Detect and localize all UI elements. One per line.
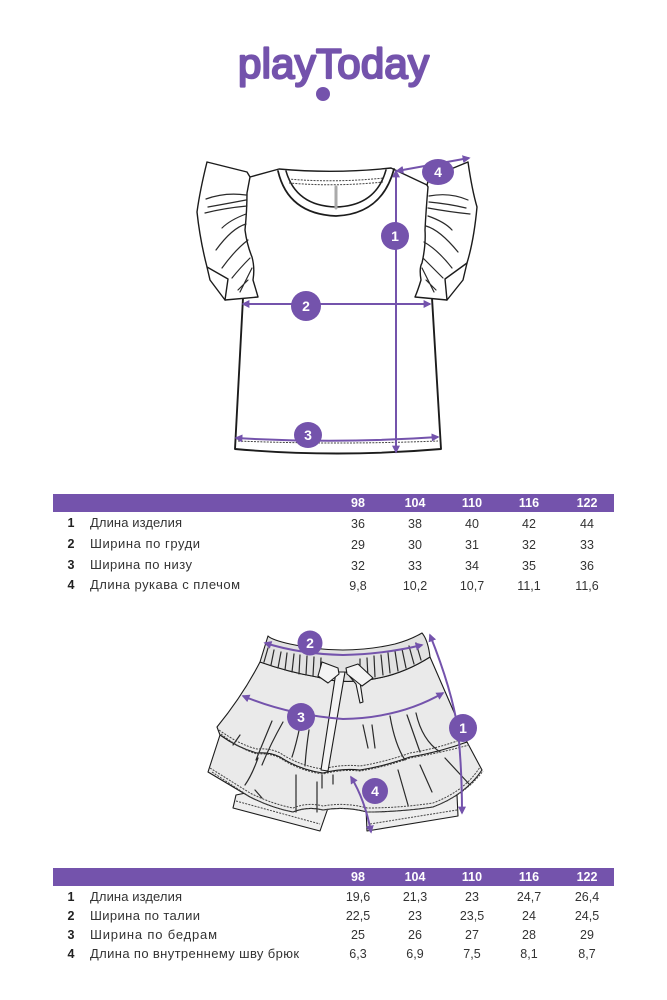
table 1 row 1: 40 bbox=[465, 517, 479, 531]
table 1 header bbox=[53, 494, 614, 512]
table 1 bbox=[53, 494, 614, 593]
table 2 header: 104 bbox=[405, 870, 425, 884]
table 2 row 2: 24 bbox=[522, 909, 536, 923]
table 2 row 1: 26,4 bbox=[575, 890, 599, 904]
table 1 row 1: Длина изделия bbox=[90, 515, 182, 530]
table 1 row 3 bbox=[68, 557, 594, 573]
table 1 row 3: 32 bbox=[351, 559, 365, 573]
table 2 row 3: 28 bbox=[522, 928, 536, 942]
t-shirt shoulders and neck bbox=[250, 168, 427, 185]
table 2 row 2: 24,5 bbox=[575, 909, 599, 923]
measure 4: sleeve: 4 bbox=[434, 164, 442, 180]
logo: playToday bbox=[238, 40, 429, 87]
table 1 row 4: 4 bbox=[68, 578, 75, 592]
table 1 header: 122 bbox=[577, 496, 597, 510]
measure 2: chest: 2 bbox=[302, 298, 310, 314]
table 1 row 1: 36 bbox=[351, 517, 365, 531]
table 2 row 3 bbox=[68, 927, 594, 942]
table 2 header: 110 bbox=[462, 870, 482, 884]
t-shirt body bbox=[235, 168, 441, 454]
t-shirt drawing bbox=[197, 162, 477, 454]
waistband gathers bbox=[264, 643, 421, 679]
measure 4: sleeve bbox=[397, 158, 469, 185]
measure 1: length: 1 bbox=[391, 228, 399, 244]
table 1 row 3: 35 bbox=[522, 559, 536, 573]
table 2 header: 116 bbox=[519, 870, 539, 884]
table 2 row 1: 1 bbox=[68, 890, 75, 904]
table 2 row 1 bbox=[68, 889, 599, 904]
table 1 row 1: 38 bbox=[408, 517, 422, 531]
table 1 row 4: 9,8 bbox=[349, 579, 367, 593]
table 2 row 1: 19,6 bbox=[346, 890, 370, 904]
table 1 row 1: 42 bbox=[522, 517, 536, 531]
measure 2: chest bbox=[243, 291, 430, 321]
table 2 row 2: 22,5 bbox=[346, 909, 370, 923]
table 2 row 3: 3 bbox=[68, 928, 75, 942]
shorts measure 1: length bbox=[430, 635, 477, 813]
t-shirt collar bbox=[278, 169, 394, 216]
table 2 row 2 bbox=[68, 908, 599, 923]
table 1 header: 104 bbox=[405, 496, 425, 510]
table 1 row 2: 2 bbox=[68, 537, 75, 551]
shorts measure 1: length: 1 bbox=[459, 720, 467, 736]
table 2 row 1: Длина изделия bbox=[90, 889, 182, 904]
table 1 row 3: 3 bbox=[68, 558, 75, 572]
tier stitching bbox=[210, 730, 483, 824]
table 1 row 1 bbox=[68, 515, 594, 531]
table 1 row 3: 33 bbox=[408, 559, 422, 573]
table 2 row 4: 6,3 bbox=[349, 947, 367, 961]
table 1 row 1: 44 bbox=[580, 517, 594, 531]
table 1 row 2: 32 bbox=[522, 538, 536, 552]
shorts measure 4: inseam bbox=[351, 777, 388, 832]
table 2 header: 122 bbox=[577, 870, 597, 884]
lower tier bbox=[208, 735, 482, 812]
t-shirt side seams and hem bbox=[235, 298, 441, 454]
table 2 header bbox=[53, 868, 614, 886]
shorts measure 3: hips bbox=[243, 693, 443, 731]
shorts measure 2: waist bbox=[265, 630, 422, 656]
table 1 row 4: 10,7 bbox=[460, 579, 484, 593]
shorts measure 4: inseam: 4 bbox=[371, 783, 379, 799]
measure 3: hem: 3 bbox=[304, 427, 312, 443]
table 2 row 1: 21,3 bbox=[403, 890, 427, 904]
table 1 row 2: 33 bbox=[580, 538, 594, 552]
table 2 row 4: 6,9 bbox=[406, 947, 424, 961]
drawstring and bow bbox=[318, 662, 373, 771]
table 2 row 4 bbox=[68, 946, 596, 961]
table 2 row 4: Длина по внутреннему шву брюк bbox=[90, 946, 299, 961]
table 2 row 4: 7,5 bbox=[463, 947, 481, 961]
table 1 row 4: 11,1 bbox=[517, 579, 541, 593]
table 2 row 4: 8,1 bbox=[520, 947, 538, 961]
table 1 row 4: Длина рукава с плечом bbox=[90, 577, 240, 592]
waistband bbox=[260, 633, 430, 681]
table 2 row 3: 25 bbox=[351, 928, 365, 942]
shorts drawing bbox=[208, 633, 483, 831]
table 1 row 4 bbox=[68, 577, 599, 593]
tier gathers bbox=[233, 713, 470, 812]
table 1 row 3: 36 bbox=[580, 559, 594, 573]
table 2 row 3: 29 bbox=[580, 928, 594, 942]
table 1 row 3: 34 bbox=[465, 559, 479, 573]
right leg bbox=[366, 795, 458, 831]
table 2 row 1: 23 bbox=[465, 890, 479, 904]
table 2 row 2: Ширина по талии bbox=[90, 908, 200, 923]
table 1 row 3: Ширина по низу bbox=[90, 557, 192, 572]
table 2 row 2: 23,5 bbox=[460, 909, 484, 923]
table 2 row 3: 26 bbox=[408, 928, 422, 942]
table 1 row 2: Ширина по груди bbox=[90, 536, 200, 551]
table 2 row 1: 24,7 bbox=[517, 890, 541, 904]
left sleeve bbox=[197, 162, 258, 300]
table 2 row 4: 8,7 bbox=[578, 947, 596, 961]
table 2 row 2: 2 bbox=[68, 909, 75, 923]
left leg bbox=[233, 790, 328, 831]
table 1 header: 110 bbox=[462, 496, 482, 510]
table 1 row 4: 11,6 bbox=[575, 579, 599, 593]
upper tier bbox=[217, 657, 467, 773]
table 1 row 4: 10,2 bbox=[403, 579, 427, 593]
measure 3: hem bbox=[236, 422, 438, 448]
table 1 header: 116 bbox=[519, 496, 539, 510]
table 2 header: 98 bbox=[351, 870, 365, 884]
measure 1: length bbox=[381, 171, 409, 452]
table 1 row 1: 1 bbox=[68, 516, 75, 530]
table 2 row 4: 4 bbox=[68, 947, 75, 961]
table 2 bbox=[53, 868, 614, 961]
right sleeve bbox=[415, 162, 477, 300]
table 2 row 3: Ширина по бедрам bbox=[90, 927, 217, 942]
hem stitching bbox=[238, 441, 438, 443]
shorts measure 2: waist: 2 bbox=[306, 635, 314, 651]
table 1 row 2 bbox=[68, 536, 594, 552]
shorts measure 3: hips: 3 bbox=[297, 709, 305, 725]
table 2 row 3: 27 bbox=[465, 928, 479, 942]
table 1 row 2: 31 bbox=[465, 538, 479, 552]
table 1 header: 98 bbox=[351, 496, 365, 510]
table 1 row 2: 29 bbox=[351, 538, 365, 552]
table 1 row 2: 30 bbox=[408, 538, 422, 552]
table 2 row 2: 23 bbox=[408, 909, 422, 923]
